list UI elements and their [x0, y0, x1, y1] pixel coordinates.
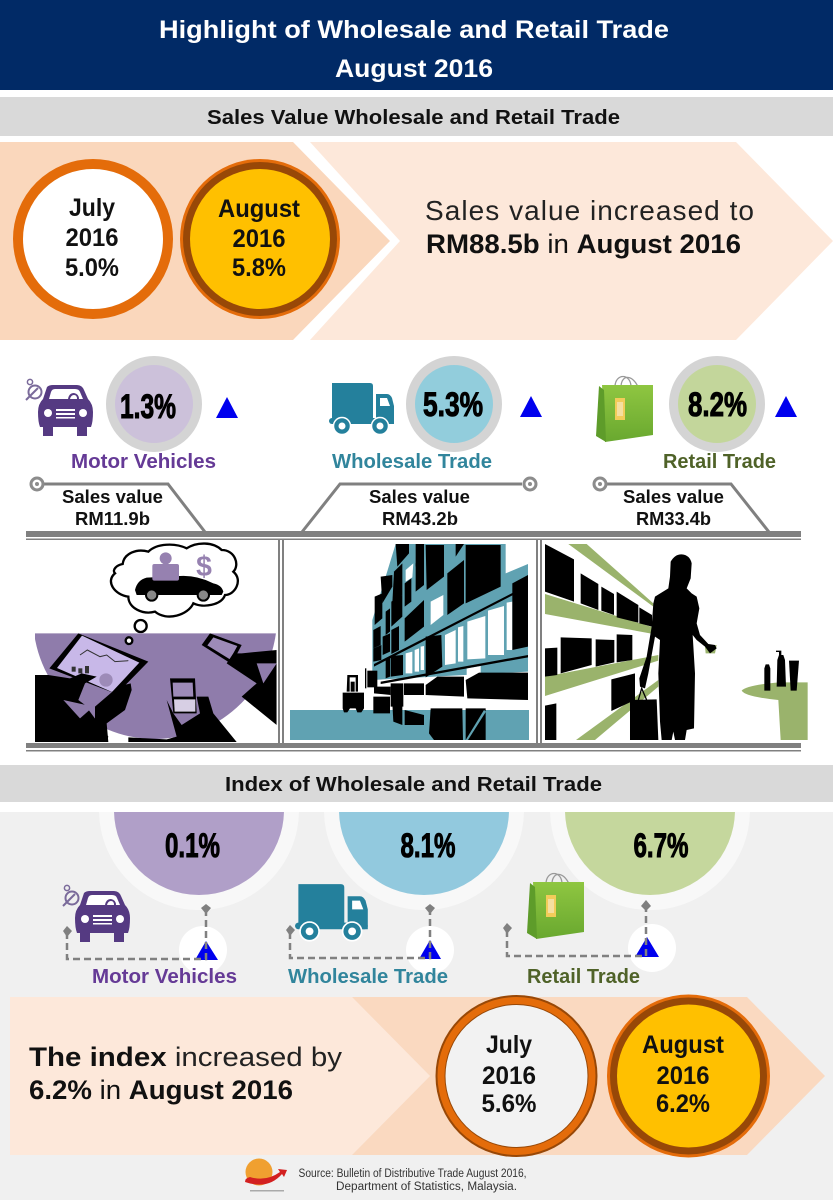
- August 2016 circle: 5.8%: [232, 254, 286, 282]
- up triangle: [419, 940, 441, 959]
- panel: motor vehicles sales: [26, 360, 238, 473]
- panel: index background: [0, 812, 833, 1200]
- panel: retail sales: [596, 360, 797, 473]
- index value: motor vehicles: 0.1%: [165, 827, 220, 865]
- July 2016 circle: 5.6%: [482, 1090, 536, 1118]
- up triangle: [635, 937, 659, 957]
- percentage circle: 8.2%: [688, 386, 747, 424]
- thought cloud: $: [196, 551, 212, 583]
- shopping bag: [630, 688, 658, 740]
- August 2016 circle: 2016: [232, 225, 286, 253]
- title banner: Highlight of Wholesale and Retail Trade: [159, 16, 669, 44]
- July 2016 circle: [18, 164, 168, 314]
- sales value statement: RM88.5b in August 2016: [426, 229, 741, 259]
- source: [298, 1168, 526, 1193]
- index circles: [114, 812, 735, 895]
- title banner: [0, 0, 833, 90]
- table with products: [742, 651, 808, 740]
- percentage circle: [674, 360, 760, 448]
- panel: wholesale sales: [329, 360, 542, 473]
- August 2016 circle: 2016: [656, 1062, 710, 1090]
- up triangle: [195, 941, 218, 960]
- callout: wholesale sales value: [302, 478, 536, 532]
- callout: motor vehicles sales value: RM11.9b: [75, 509, 150, 529]
- index statement: [29, 1042, 343, 1105]
- up triangle: [520, 396, 542, 417]
- icon: car: [26, 379, 93, 436]
- index statement: The index increased by: [29, 1042, 343, 1072]
- index item: wholesale: [286, 884, 454, 988]
- panel: index chevrons: [10, 994, 825, 1158]
- panel: sales value chevrons: [0, 142, 833, 340]
- up triangle: [775, 396, 797, 417]
- forklift: [343, 668, 377, 712]
- index value: retail: 6.7%: [634, 827, 688, 865]
- icon: truck: [329, 383, 394, 434]
- up triangle: [216, 397, 238, 418]
- August 2016 circle: [180, 159, 340, 319]
- July 2016 circle: 5.0%: [65, 254, 119, 282]
- callout: retail sales value: Sales value: [623, 487, 724, 507]
- icon: shopping bag: [527, 874, 584, 939]
- callout: motor vehicles sales value: Sales value: [62, 487, 163, 507]
- title banner: August 2016: [335, 55, 493, 83]
- icon: shopping bag: [596, 376, 653, 442]
- icon: car: [63, 885, 130, 942]
- source: Department of Statistics, Malaysia.: [336, 1181, 517, 1193]
- heading: index: [0, 765, 833, 802]
- label: Wholesale Trade: [288, 966, 448, 988]
- heading: index: Index of Wholesale and Retail Trade: [225, 774, 602, 796]
- sales value statement: Sales value increased to: [425, 195, 754, 226]
- July 2016 circle: 2016: [66, 224, 118, 252]
- callout: retail sales value: RM33.4b: [636, 509, 711, 529]
- August 2016 circle: [607, 994, 770, 1158]
- callout: wholesale sales value: RM43.2b: [382, 509, 458, 529]
- percentage circle: [410, 360, 498, 448]
- callout: wholesale sales value: Sales value: [369, 487, 470, 507]
- illustration: warehouse: [290, 544, 529, 740]
- index statement: 6.2% in August 2016: [29, 1075, 293, 1105]
- illustration: motor vehicles buyers: [35, 542, 277, 742]
- sales value statement: [425, 195, 754, 259]
- illustration frame rails: [26, 531, 801, 752]
- August 2016 circle: August: [642, 1031, 725, 1059]
- label: Wholesale Trade: [332, 451, 492, 473]
- label: Retail Trade: [527, 966, 640, 988]
- shopper silhouette: [639, 554, 717, 740]
- logo: [245, 1158, 287, 1192]
- heading: sales value: [0, 97, 833, 136]
- thought cloud: [111, 544, 238, 632]
- percentage circle: [110, 360, 198, 448]
- icon: truck: [295, 884, 368, 941]
- source: Source: Bulletin of Distributive Trade August 2016,: [298, 1168, 526, 1180]
- August 2016 circle: 6.2%: [656, 1090, 710, 1118]
- July 2016 circle: [436, 995, 598, 1157]
- index item: motor vehicles: [63, 885, 237, 988]
- July 2016 circle: 2016: [482, 1062, 536, 1090]
- label: Motor Vehicles: [92, 966, 237, 988]
- index value: wholesale: 8.1%: [400, 827, 456, 865]
- label: Motor Vehicles: [71, 451, 216, 473]
- percentage circle: 1.3%: [120, 388, 176, 426]
- index item: retail: [503, 874, 676, 988]
- July 2016 circle: July: [486, 1031, 532, 1059]
- August 2016 circle: August: [218, 195, 301, 223]
- label: Retail Trade: [663, 451, 776, 473]
- callout: motor vehicles sales value: [31, 478, 205, 532]
- July 2016 circle: July: [69, 194, 115, 222]
- illustration: retail shopper: [545, 544, 808, 740]
- heading: sales value: Sales Value Wholesale and Retail Trade: [207, 107, 620, 129]
- callout: retail sales value: [594, 478, 769, 532]
- percentage circle: 5.3%: [423, 386, 483, 424]
